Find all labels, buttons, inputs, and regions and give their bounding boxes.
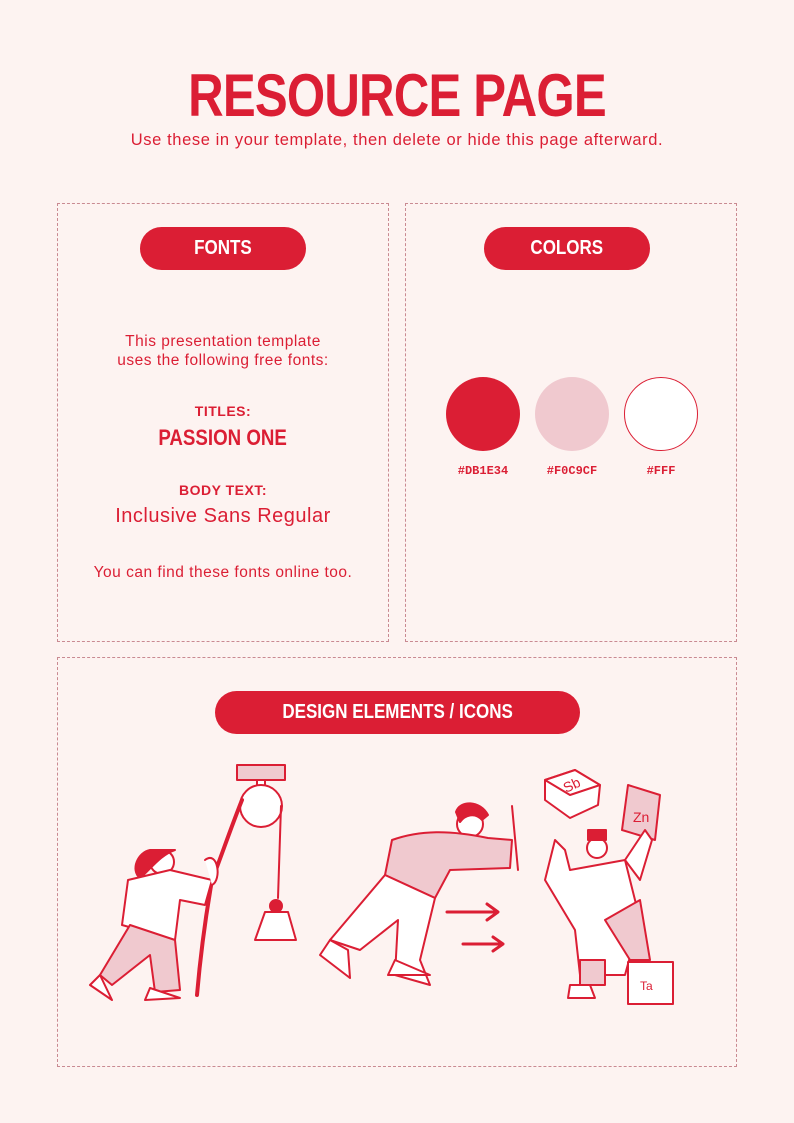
pill: fonts heading xyxy=(140,227,306,270)
icon: scientist with element cubes: Zn xyxy=(633,809,649,825)
text: body text label: BODY TEXT: xyxy=(179,482,267,498)
label: white: #FFF xyxy=(647,464,675,478)
icon: man pushing xyxy=(320,803,518,985)
icon: arrows xyxy=(447,904,503,951)
text: passion one: PASSION ONE xyxy=(159,425,287,450)
icon: scientist with element cubes: Ta xyxy=(640,979,653,993)
pill: design elements heading xyxy=(215,691,580,734)
pill: colors heading xyxy=(484,227,650,270)
title: RESOURCE PAGE xyxy=(188,62,606,129)
pill: fonts heading: FONTS xyxy=(194,237,252,259)
pill: colors heading: COLORS xyxy=(531,237,603,259)
icon: scientist with element cubes xyxy=(545,770,673,1004)
text: titles label: TITLES: xyxy=(195,403,251,419)
swatch: red xyxy=(446,377,520,451)
label: pink: #F0C9CF xyxy=(547,464,597,478)
panel: fonts xyxy=(57,203,389,642)
swatch: white xyxy=(624,377,698,451)
label: red: #DB1E34 xyxy=(458,464,508,478)
text: inclusive sans: Inclusive Sans Regular xyxy=(115,505,331,527)
text: intro: uses the following free fonts: xyxy=(117,352,329,369)
swatch: pink xyxy=(535,377,609,451)
text: intro xyxy=(117,333,329,369)
text: footer note: You can find these fonts online too. xyxy=(94,564,352,581)
panel: colors xyxy=(405,203,737,642)
icon: scientist with element cubes: Sb xyxy=(561,774,583,796)
icon: woman pulling pulley xyxy=(90,765,296,1000)
text: intro: This presentation template xyxy=(125,333,321,350)
panel: design elements xyxy=(57,657,737,1067)
pill: design elements heading: DESIGN ELEMENTS / ICONS xyxy=(282,701,513,723)
subtitle: Use these in your template, then delete or hide this page afterward. xyxy=(131,131,663,149)
